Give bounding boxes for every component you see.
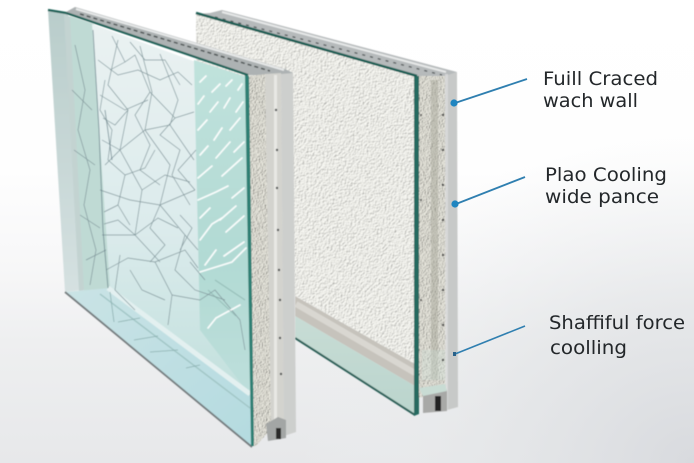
glass edge — [414, 76, 419, 416]
lower glass band — [295, 316, 415, 415]
insulation strip — [249, 74, 272, 446]
top rail right unit — [196, 10, 457, 77]
bottom foot — [419, 384, 447, 413]
screws left — [275, 109, 282, 375]
callout: Fuill Craced wach wall — [450, 68, 658, 112]
callout: Shaffiful force coolling: Shaffiful force — [549, 312, 685, 334]
left glass edge — [245, 75, 254, 446]
callout: Shaffiful force coolling — [453, 312, 685, 359]
callout: Plao Cooling wide pance — [451, 164, 667, 208]
right frame — [445, 72, 458, 410]
glass face — [65, 16, 252, 447]
callout: Plao Cooling wide pance: wide pance — [545, 186, 659, 208]
left right-hand frame — [281, 73, 296, 436]
callout: Shaffiful force coolling: coolling — [550, 337, 627, 359]
silver channel — [265, 73, 284, 428]
top rail left unit — [66, 7, 293, 76]
left bottom foot — [266, 417, 286, 441]
left glass unit — [48, 7, 296, 447]
callout: Fuill Craced wach wall: Fuill Craced — [543, 68, 658, 90]
callout: Fuill Craced wach wall: wach wall — [543, 90, 638, 112]
back frame — [48, 10, 82, 292]
callout: Plao Cooling wide pance: Plao Cooling — [545, 164, 667, 186]
textured panel — [196, 14, 415, 364]
caustic highlights — [198, 76, 246, 328]
insulation layers — [418, 76, 446, 398]
glass front bottom edge — [65, 292, 252, 447]
screws — [420, 114, 444, 361]
bottom rail — [295, 296, 415, 386]
glass floor — [65, 288, 252, 447]
crack lines — [72, 36, 245, 350]
right glass unit — [196, 10, 458, 416]
